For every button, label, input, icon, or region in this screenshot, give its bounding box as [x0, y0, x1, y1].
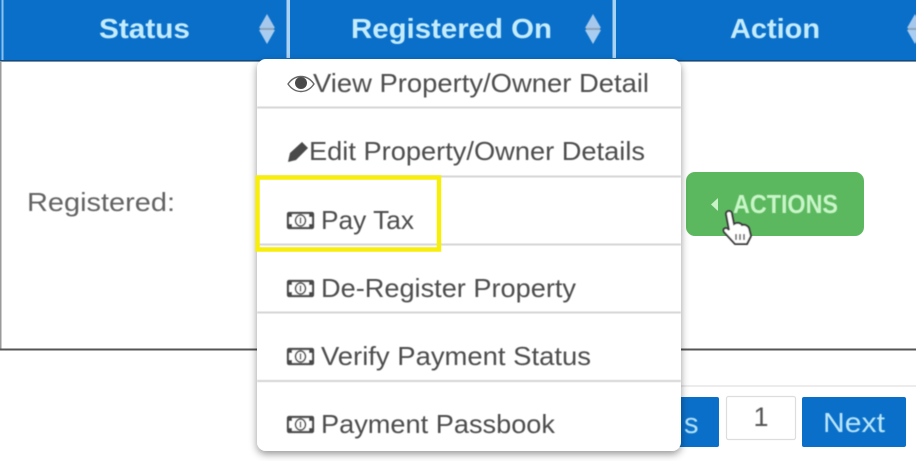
page number box: 1: [753, 402, 769, 432]
menu item: Verify Payment Status: Verify Payment Status: [321, 341, 591, 371]
table body borders: [0, 61, 916, 387]
header: Status: Status: [99, 13, 190, 44]
actions button: ACTIONS: [733, 189, 838, 219]
previous button: s: [684, 408, 698, 440]
actions button: [686, 172, 864, 236]
menu item: View Property/Owner Detail: View Property/Owner Detail: [313, 68, 649, 98]
menu item: Payment Passbook: Payment Passbook: [321, 409, 556, 439]
menu item: Edit Property/Owner Details: Edit Property/Owner Details: [309, 136, 645, 166]
next button: Next: [823, 407, 885, 438]
sort icon: Status: [259, 14, 275, 44]
next button: [802, 397, 906, 447]
table header bar: [0, 0, 916, 62]
menu item: De-Register Property: De-Register Property: [321, 273, 576, 303]
page number box: [726, 396, 796, 440]
pagination: [650, 396, 906, 447]
icon: hand cursor: [723, 211, 751, 244]
menu item: Pay Tax: Pay Tax: [321, 205, 414, 235]
status value: Registered:: [27, 187, 175, 217]
previous button: [650, 397, 719, 447]
header: Registered On: Registered On: [351, 13, 552, 44]
sort icon: Action: [907, 14, 916, 44]
yellow highlight box around Pay Tax: [258, 178, 439, 250]
header: Action: Action: [730, 13, 820, 44]
sort icon: Registered On: [585, 14, 601, 44]
dropdown menu: [257, 59, 681, 451]
